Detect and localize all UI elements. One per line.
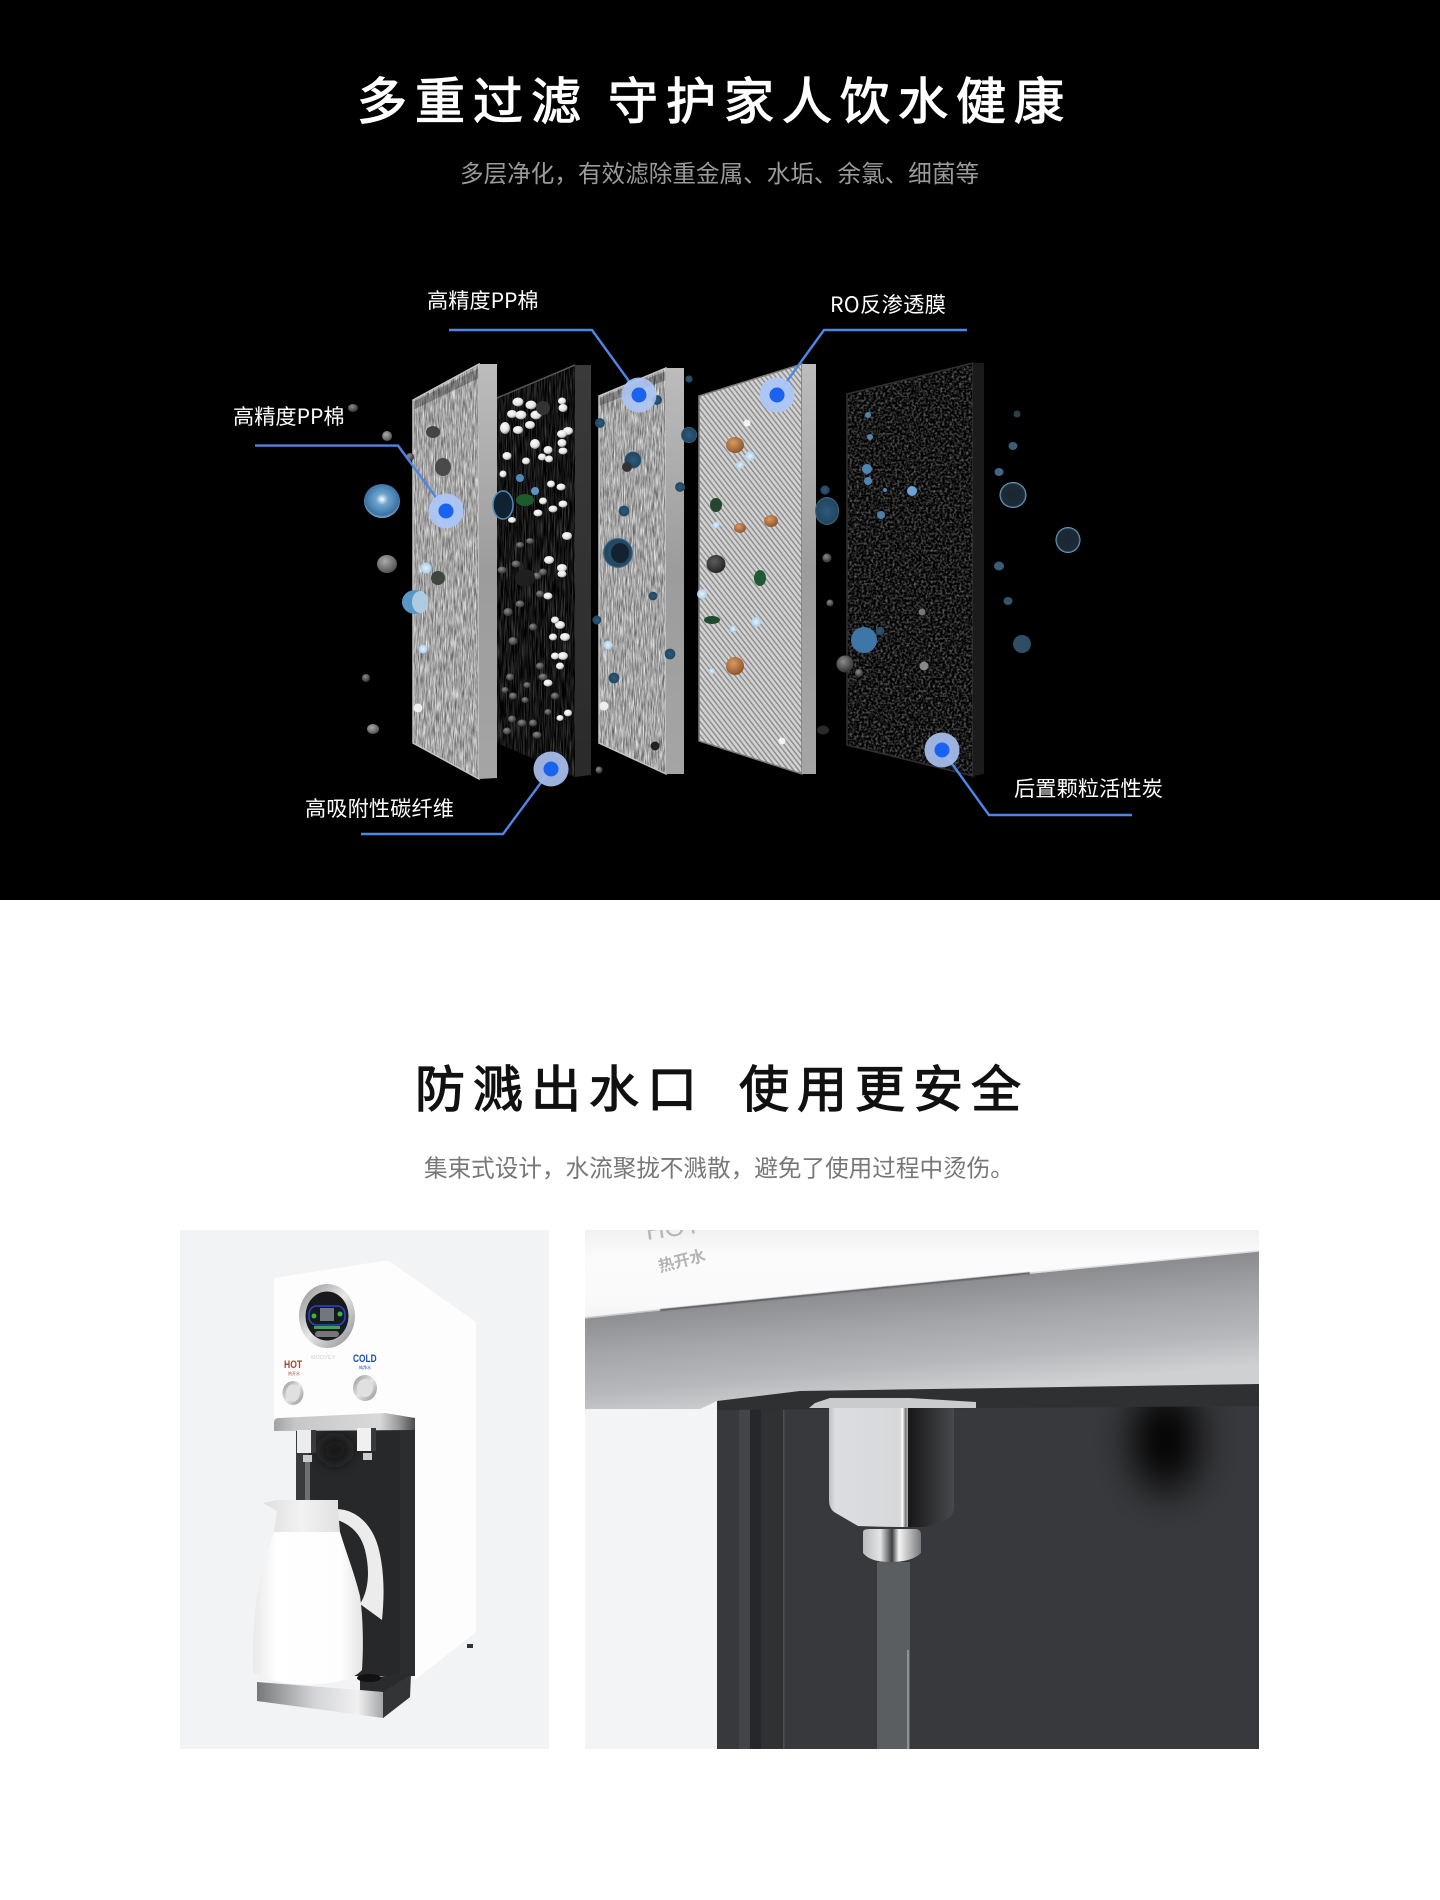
- machine body: [274, 1261, 476, 1680]
- callout: 高吸附性碳纤维: [305, 752, 568, 834]
- callout: 后置颗粒活性炭: 后置颗粒活性炭: [1014, 772, 1163, 803]
- callout: 高精度PP棉 top: 高精度PP棉: [427, 284, 539, 315]
- HOT label: HOT: [284, 1359, 302, 1371]
- particles right of layer 5: [994, 410, 1080, 653]
- HOT engraved label cut off: HOT: [644, 1209, 702, 1246]
- title: anti-splash outlet: 使用更安全: [739, 1050, 1029, 1122]
- white front panel: [585, 1230, 1259, 1319]
- callout: 高精度PP棉 top: [427, 284, 656, 412]
- filter layer 5: post activated carbon: [847, 363, 984, 776]
- particles on layer 5: [862, 412, 928, 670]
- exploded filter diagram: [348, 363, 1080, 779]
- kettle: [253, 1500, 384, 1684]
- hot button: [282, 1381, 304, 1405]
- display dial: [299, 1284, 355, 1348]
- subtitle: anti-splash outlet: 集束式设计，水流聚拢不溅散，避免了使用过程中烫伤。: [424, 1150, 1014, 1184]
- 热开水 engraved label: 热开水: [655, 1242, 708, 1277]
- callout: 后置颗粒活性炭: [924, 732, 1163, 815]
- panel: faucet close-up photo: [585, 1209, 1259, 1749]
- callout: 高精度PP棉 left: 高精度PP棉: [233, 400, 345, 431]
- filter layer 1: PP cotton: [413, 364, 497, 779]
- callout: RO反渗透膜: [760, 288, 967, 412]
- title: anti-splash outlet: 防溅出水口: [415, 1050, 705, 1122]
- 热开水 label: 热开水: [288, 1370, 300, 1377]
- faucets and water stream: [297, 1428, 376, 1500]
- callout: 高吸附性碳纤维: 高吸附性碳纤维: [305, 792, 454, 823]
- particles around layer 1: [348, 404, 451, 734]
- panel: black filtration section: [0, 0, 1440, 900]
- title: filtration: 多重过滤: [357, 62, 589, 134]
- stainless steel band: [585, 1251, 1259, 1409]
- filter layer 3: PP cotton: [599, 368, 684, 774]
- particles on carbon fibre layer: [493, 398, 573, 738]
- filter layer 2: carbon fibre: [497, 365, 591, 777]
- dark back panel: [717, 1380, 1259, 1749]
- filter layer 4: RO membrane: [699, 364, 816, 774]
- brand mark: MOOVEY: [311, 1355, 335, 1361]
- panel: product photo with kettle: [180, 1230, 549, 1749]
- particles on layer 3: [592, 376, 697, 774]
- water stream: [877, 1562, 910, 1749]
- callout: RO反渗透膜: RO反渗透膜: [830, 288, 946, 319]
- cold button: [353, 1375, 377, 1401]
- COLD label: COLD: [353, 1353, 377, 1365]
- faucet: [809, 1398, 976, 1562]
- drip tray base: [257, 1673, 411, 1718]
- title: filtration: 守护家人饮水健康: [608, 62, 1072, 134]
- callout: 高精度PP棉 left: [233, 400, 464, 528]
- subtitle: filtration: 多层净化，有效滤除重金属、水垢、余氯、细菌等: [460, 155, 979, 189]
- particles between layers 4 and 5: [815, 486, 884, 734]
- particles on layer 4: [697, 420, 786, 744]
- 纯净水 label: 纯净水: [359, 1364, 371, 1371]
